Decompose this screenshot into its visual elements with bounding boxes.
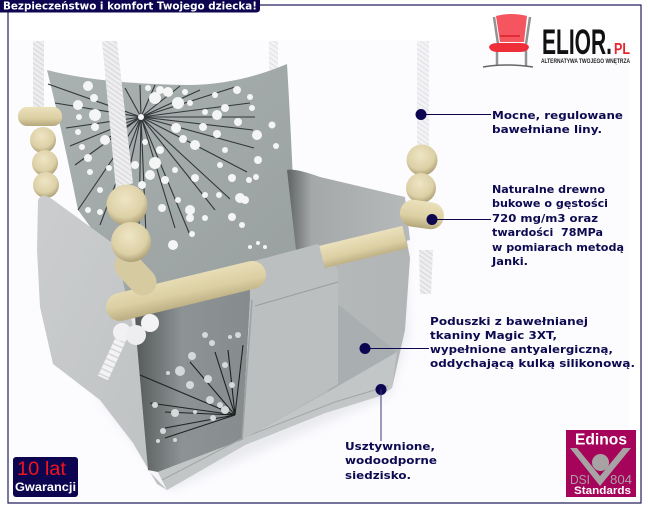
icon: red chair [483, 14, 533, 67]
callout: pillows [360, 315, 635, 370]
left bar and beads [18, 107, 62, 198]
front strap [242, 244, 338, 440]
badge name: Edinos [575, 432, 627, 448]
product photo: baby swing [18, 41, 446, 490]
strap edge [242, 300, 252, 440]
strap hem [255, 282, 338, 306]
callout text: bawełniane liny. [492, 123, 602, 136]
callout: seat [345, 384, 437, 482]
title [0, 0, 260, 13]
callout text: w pomiarach metodą [492, 241, 624, 254]
callout: ropes [416, 109, 623, 136]
badge 804: 804 [610, 472, 632, 487]
callout text: Mocne, regulowane [492, 109, 623, 122]
badge background [566, 430, 636, 497]
marker dot [426, 214, 438, 225]
callout text: Usztywnione, [345, 440, 435, 453]
callout text: tkaniny Magic 3XT, [430, 329, 557, 342]
callout text: Poduszki z bawełnianej [430, 315, 588, 328]
wooden bar right [322, 237, 405, 257]
callout text [345, 440, 437, 482]
callout text: oddychającą kulką silikonową. [430, 357, 635, 370]
leader line [380, 390, 382, 441]
badge standards: Standards [574, 485, 631, 497]
dandelion seeds [73, 81, 279, 250]
dandelion stems [48, 84, 255, 235]
right knob [398, 198, 446, 231]
callout text: bukowe o gęstości [492, 197, 608, 210]
middle beads [106, 184, 151, 262]
back ropes [33, 41, 278, 109]
callout text: Janki. [491, 255, 528, 268]
right back panel [287, 170, 410, 262]
right beads [406, 144, 438, 203]
callout text: wodoodporne [345, 454, 437, 467]
callout text: Naturalne drewno [492, 183, 605, 196]
badge years: 10 lat [17, 459, 67, 480]
left side panel [37, 196, 167, 490]
callout text [491, 183, 624, 268]
callout text: wypełnione antyalergiczną, [430, 343, 613, 356]
lower dandelion stems [140, 345, 243, 438]
badge background [13, 457, 78, 497]
rope knot [103, 314, 159, 378]
title band [0, 0, 260, 12]
callout text [430, 315, 635, 370]
icon: V mark [570, 448, 631, 486]
callout text: twardości 78MPa [492, 226, 603, 239]
badge label: Gwarancji [15, 482, 76, 494]
callout: wood [426, 183, 624, 268]
right rope [417, 41, 429, 149]
seat front [158, 352, 397, 490]
callout text: 720 mg/m3 oraz [492, 212, 598, 225]
leader line [421, 114, 491, 116]
small right pillow [325, 305, 397, 392]
leader line [365, 348, 429, 350]
soft shadow [45, 180, 408, 490]
marker dot [360, 343, 370, 354]
back pillow [47, 64, 300, 310]
lower dandelion seeds [152, 332, 241, 443]
marker dot [416, 109, 426, 120]
middle rope [102, 41, 133, 190]
callout text [492, 109, 623, 136]
right lower rope [419, 250, 433, 294]
seat hem [162, 386, 388, 480]
badge DSI: DSI [570, 472, 590, 487]
callout text: siedzisko. [345, 469, 411, 482]
badge: Edinos standards [566, 430, 636, 497]
badge: 10 year warranty [13, 457, 78, 497]
leader line [432, 218, 491, 220]
icon: circle [592, 454, 609, 471]
logo: ELIOR.PL [483, 14, 630, 67]
wooden bar left [120, 275, 252, 307]
marker dot [376, 384, 386, 395]
front fabric and seat [158, 232, 410, 490]
left knob [128, 266, 143, 282]
lower opening with pillow [135, 285, 252, 472]
logo suffix: PL [614, 41, 630, 58]
